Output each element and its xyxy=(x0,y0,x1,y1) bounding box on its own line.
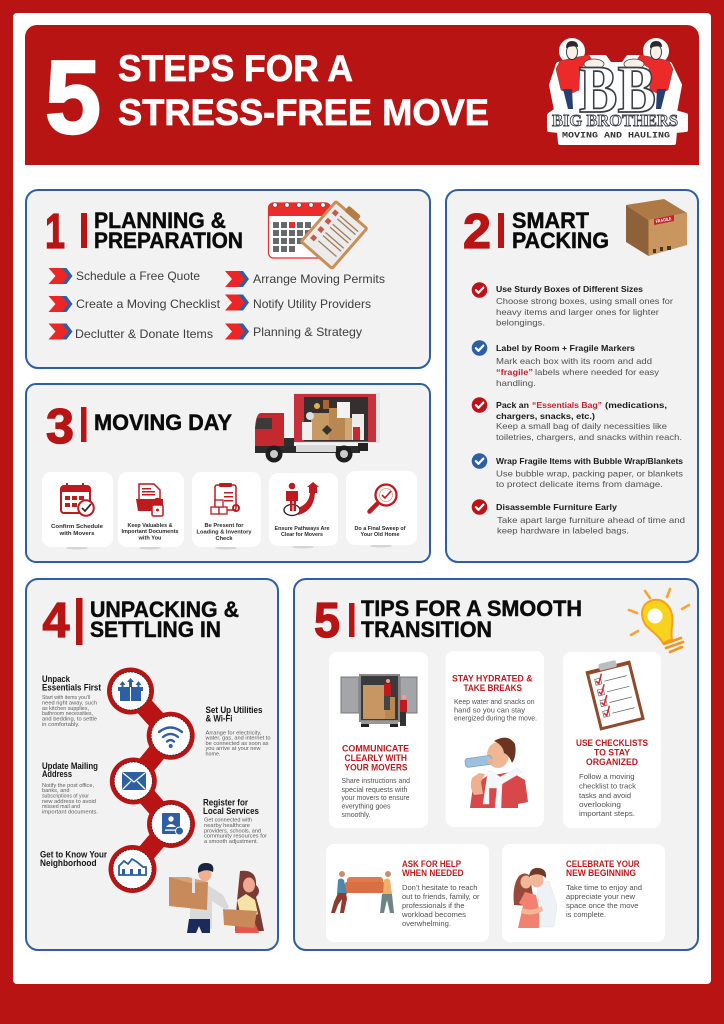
heading xyxy=(576,737,648,767)
step: update mailing address: Notify the post office, xyxy=(42,783,94,789)
body text: hand so you can stay xyxy=(454,705,525,714)
tip: label by room: labels where needed for easy xyxy=(535,367,660,377)
card: keep valuables xyxy=(118,472,184,550)
tip: label by room: handling. xyxy=(496,378,536,388)
heading: ASK FOR HELP xyxy=(402,858,461,869)
caption: Ensure Pathways Are xyxy=(274,526,330,532)
card: confirm schedule xyxy=(42,472,113,550)
step: register for local services: providers, schools, and xyxy=(204,828,261,834)
step: register for local services: community resources for xyxy=(204,834,267,840)
body text: smoothly. xyxy=(342,810,370,819)
step: unpack essentials first: and bedding, to settle xyxy=(42,716,97,722)
illustration: checklist clipboard xyxy=(584,656,645,731)
heading xyxy=(342,743,409,773)
body text xyxy=(454,697,537,723)
step: set up utilities and wi-fi: water, gas, and internet to xyxy=(204,736,270,742)
tip: pack an essentials bag: chargers, snacks, etc.) xyxy=(496,411,595,421)
step number 4: 4 xyxy=(42,594,70,648)
caption: Be Present for xyxy=(204,523,244,529)
heading: TO STAY xyxy=(594,746,631,758)
tip: pack an essentials bag xyxy=(472,397,682,442)
heading: NEW BEGINNING xyxy=(566,867,636,878)
heading: planning and preparation xyxy=(94,208,243,253)
panel 5: tips for a smooth transition xyxy=(294,579,698,950)
tip: disassemble furniture xyxy=(472,499,685,536)
step number 3 xyxy=(46,400,86,454)
heading: unpacking and settling in xyxy=(90,597,239,642)
timeline of circles xyxy=(107,668,195,893)
caption: Your Old Home xyxy=(360,532,400,538)
list item: notify utility providers xyxy=(225,294,371,311)
panel 4: unpacking and settling in xyxy=(26,579,278,950)
body text: energized during the move. xyxy=(454,714,537,723)
logo: Big Brothers Moving and Hauling: BIG BROTHERS xyxy=(552,111,678,130)
step: set up utilities and wi-fi: home. xyxy=(206,752,221,758)
step: unpack essentials first: Essentials First xyxy=(42,682,101,692)
tip: wrap fragile items: Wrap Fragile Items with Bubble Wrap/Blankets xyxy=(496,456,683,466)
list item: create a moving checklist: Create a Moving Checklist xyxy=(76,297,221,311)
illustration: two people carrying sofa xyxy=(331,871,394,913)
body text: out to friends, family, or xyxy=(402,892,480,901)
body text: Don’t hesitate to reach xyxy=(402,883,478,892)
step: update mailing address: new address to avoid xyxy=(42,799,96,805)
heading: USE CHECKLISTS xyxy=(576,737,648,748)
step: update mailing address: Update Mailing xyxy=(42,761,98,771)
illustration: couple carrying boxes xyxy=(169,863,264,933)
caption: Confirm Schedule xyxy=(51,524,103,530)
tip: wrap fragile items xyxy=(472,453,683,489)
caption: with Movers xyxy=(58,531,94,537)
tip: use sturdy boxes: Choose strong boxes, using small ones for xyxy=(496,296,673,306)
card: celebrate xyxy=(502,844,665,942)
step: unpack essentials first: bathroom necessities, xyxy=(42,711,93,717)
step number 1 xyxy=(45,205,87,259)
card: communicate clearly xyxy=(329,652,428,828)
step number 5 xyxy=(314,594,354,648)
icon: fragile cardboard box: FRAGILE xyxy=(655,216,672,224)
icon: wi-fi xyxy=(147,712,195,760)
tip: pack an essentials bag: Keep a small bag of daily necessities like xyxy=(496,421,667,431)
tip: pack an essentials bag: “Essentials Bag” xyxy=(532,400,602,410)
step: set up utilities and wi-fi: you arrive at your new xyxy=(206,746,261,752)
caption: Important Documents xyxy=(122,529,178,535)
tip: label by room: Mark each box with its room and add xyxy=(496,356,652,366)
body text: your movers to ensure xyxy=(342,793,410,802)
step number 2: 2 xyxy=(463,205,491,259)
card: final sweep xyxy=(346,471,417,548)
heading: tips for a smooth transition xyxy=(361,596,582,642)
heading xyxy=(566,858,640,878)
step: register for local services: nearby healthcare xyxy=(204,823,250,829)
heading: STAY HYDRATED & xyxy=(452,673,533,684)
body text: Share instructions and xyxy=(342,776,410,785)
card: ensure pathways xyxy=(269,473,338,548)
step: register for local services: Register for xyxy=(203,798,248,808)
panel 2: smart packing xyxy=(446,190,698,562)
card: be present xyxy=(192,472,261,550)
heading: tips for a smooth transition: TIPS FOR A SMOOTH xyxy=(361,596,582,621)
illustration: movers at truck xyxy=(341,675,417,727)
heading: tips for a smooth transition: TRANSITION xyxy=(361,617,492,642)
caption xyxy=(274,526,330,538)
tip: use sturdy boxes: heavy items and larger ones for lighter xyxy=(496,307,659,317)
step: register for local services: Local Services xyxy=(203,806,259,816)
logo: Big Brothers Moving and Hauling: MOVING AND HAULING xyxy=(562,130,670,140)
card: use checklists xyxy=(563,652,661,828)
icon: fragile cardboard box xyxy=(626,199,687,256)
heading: smart packing: SMART xyxy=(512,208,590,233)
step: set up utilities and wi-fi: Arrange for electricity, xyxy=(206,730,262,736)
tip: pack an essentials bag: Pack an xyxy=(496,400,529,410)
big number 5: 5 xyxy=(45,40,101,156)
step: set up utilities and wi-fi xyxy=(204,705,270,758)
heading: CELEBRATE YOUR xyxy=(566,858,640,869)
body text xyxy=(566,883,642,919)
step number 2 xyxy=(463,205,504,259)
icon: envelope xyxy=(110,758,157,804)
body text: workload becomes xyxy=(401,910,466,919)
heading: COMMUNICATE xyxy=(342,743,409,754)
step: get to know your neighborhood: Get to Know Your xyxy=(40,850,107,860)
tip: use sturdy boxes xyxy=(472,282,673,328)
tip: use sturdy boxes: belongings. xyxy=(496,318,545,328)
body text xyxy=(342,776,410,819)
tip: pack an essentials bag: (medications, xyxy=(605,400,667,410)
list item: planning and strategy xyxy=(225,324,362,340)
body text: overlooking xyxy=(579,800,621,809)
body text xyxy=(579,772,636,818)
heading: moving day: MOVING DAY xyxy=(94,410,232,435)
heading xyxy=(402,858,464,878)
header banner xyxy=(25,25,699,165)
body text: tasks and avoid xyxy=(579,791,631,800)
step number 3: 3 xyxy=(46,400,74,454)
step: unpack essentials first xyxy=(42,674,101,728)
heading xyxy=(452,673,533,693)
card: ask for help xyxy=(326,844,489,942)
tip: wrap fragile items: Use bubble wrap, packing paper, or blankets xyxy=(496,468,683,478)
list item: planning and strategy: Planning & Strategy xyxy=(253,325,362,339)
caption: Do a Final Sweep of xyxy=(354,526,406,532)
heading: TAKE BREAKS xyxy=(464,682,522,693)
body text: Take time to enjoy and xyxy=(566,883,642,892)
icon: person and path arrow xyxy=(284,482,319,516)
caption xyxy=(51,524,103,537)
illustration: happy couple xyxy=(514,868,557,928)
body text xyxy=(401,883,480,928)
heading: ORGANIZED xyxy=(586,756,638,767)
main title: STRESS-FREE MOVE xyxy=(118,92,489,133)
illustration: moving truck xyxy=(255,393,380,462)
step: update mailing address: banks, and xyxy=(42,788,70,794)
main title: STEPS FOR A xyxy=(118,48,353,89)
tip: disassemble furniture: Disassemble Furniture Early xyxy=(496,502,617,512)
caption: with You xyxy=(137,536,162,542)
body text: important steps. xyxy=(579,809,635,818)
heading: WHEN NEEDED xyxy=(402,867,464,878)
list item: schedule a free quote: Schedule a Free Quote xyxy=(76,269,200,283)
body text: Follow a moving xyxy=(579,772,634,781)
step: update mailing address: Address xyxy=(42,769,72,779)
caption xyxy=(196,523,252,542)
list item: arrange moving permits: Arrange Moving Permits xyxy=(253,272,385,286)
step: get to know your neighborhood xyxy=(40,850,107,868)
heading: unpacking and settling in: SETTLING IN xyxy=(90,617,221,642)
body text: everything goes xyxy=(342,802,391,810)
logo: Big Brothers Moving and Hauling: BB xyxy=(579,51,656,127)
step number 4 xyxy=(42,594,82,648)
heading: planning and preparation: PREPARATION xyxy=(94,228,243,253)
panel 1: planning and preparation xyxy=(26,190,430,368)
icon: documents and lock xyxy=(136,484,163,516)
tip: disassemble furniture: Take apart large furniture ahead of time and xyxy=(497,515,685,525)
heading: YOUR MOVERS xyxy=(344,762,408,773)
heading: smart packing xyxy=(512,208,609,253)
heading: unpacking and settling in: UNPACKING & xyxy=(90,597,239,622)
step: update mailing address: subscriptions of your xyxy=(42,794,89,800)
caption: Loading & Inventory xyxy=(196,530,252,536)
icon: magnifying glass xyxy=(370,484,396,512)
list item: notify utility providers: Notify Utility Providers xyxy=(253,297,371,311)
step: unpack essentials first: in comfortably. xyxy=(42,722,80,728)
step: register for local services xyxy=(203,798,267,845)
tip: label by room: Label by Room + Fragile Markers xyxy=(496,343,635,353)
body text: professionals if the xyxy=(402,901,464,910)
step: register for local services: Get connected with xyxy=(204,818,252,824)
caption: Check xyxy=(216,536,233,542)
step number 5: 5 xyxy=(314,594,340,648)
body text: appreciate your new xyxy=(566,892,636,901)
main title xyxy=(118,48,489,133)
step: update mailing address: missed mail and xyxy=(42,804,80,810)
heading: smart packing: PACKING xyxy=(512,228,609,253)
body text: overwhelming. xyxy=(402,919,451,928)
tip: label by room: “fragile” xyxy=(496,367,533,377)
icon: calendar check xyxy=(61,483,94,516)
body text: checklist to track xyxy=(579,782,636,790)
caption xyxy=(122,523,178,542)
tip: pack an essentials bag: toiletries, chargers, and snacks within reach. xyxy=(496,432,682,442)
icon: inventory clipboard xyxy=(211,483,239,514)
icon: light bulb xyxy=(629,589,689,652)
step: unpack essentials first: Start with items you'll xyxy=(42,695,90,701)
body text: space once the move xyxy=(566,901,638,910)
step: unpack essentials first: need right away, such xyxy=(42,700,97,706)
body text: special requests with xyxy=(342,785,408,794)
tip: use sturdy boxes: Use Sturdy Boxes of Different Sizes xyxy=(496,284,643,294)
logo: Big Brothers Moving and Hauling xyxy=(549,40,686,143)
step: register for local services: a smooth adjustment. xyxy=(204,839,258,845)
step: set up utilities and wi-fi: & Wi-Fi xyxy=(206,714,232,724)
tip: wrap fragile items: to protect delicate items from damage. xyxy=(496,479,663,489)
card: stay hydrated xyxy=(446,651,544,827)
step: set up utilities and wi-fi: be connected as soon as xyxy=(206,741,269,747)
step: unpack essentials first: Unpack xyxy=(42,674,71,684)
icon: registration card xyxy=(147,800,195,848)
step: update mailing address xyxy=(42,761,98,816)
list item: declutter and donate items: Declutter & Donate Items xyxy=(75,327,213,341)
caption: Clear for Movers xyxy=(281,532,323,538)
tip: label by room xyxy=(472,340,660,388)
caption: Keep Valuables & xyxy=(128,523,172,529)
body text: is complete. xyxy=(566,910,606,919)
step: get to know your neighborhood: Neighborhood xyxy=(40,858,96,868)
step: update mailing address: important documents. xyxy=(42,810,98,816)
caption xyxy=(354,526,406,538)
list item: declutter and donate items xyxy=(48,324,213,341)
panel 3: moving day xyxy=(26,384,430,562)
heading: planning and preparation: PLANNING & xyxy=(94,208,226,233)
icon: neighborhood houses xyxy=(108,845,156,893)
step number 1: 1 xyxy=(45,205,65,259)
body text: Keep water and snacks on xyxy=(454,697,534,706)
heading: CLEARLY WITH xyxy=(344,752,407,763)
illustration: man drinking water xyxy=(465,738,528,808)
step: unpack essentials first: as kitchen supplies, xyxy=(42,706,89,712)
icon: calendar and clipboard xyxy=(268,196,372,271)
icon: box with arrows xyxy=(107,668,154,714)
step: set up utilities and wi-fi: Set Up Utilities xyxy=(206,705,262,715)
tip: disassemble furniture: keep hardware in labeled bags. xyxy=(497,526,629,536)
